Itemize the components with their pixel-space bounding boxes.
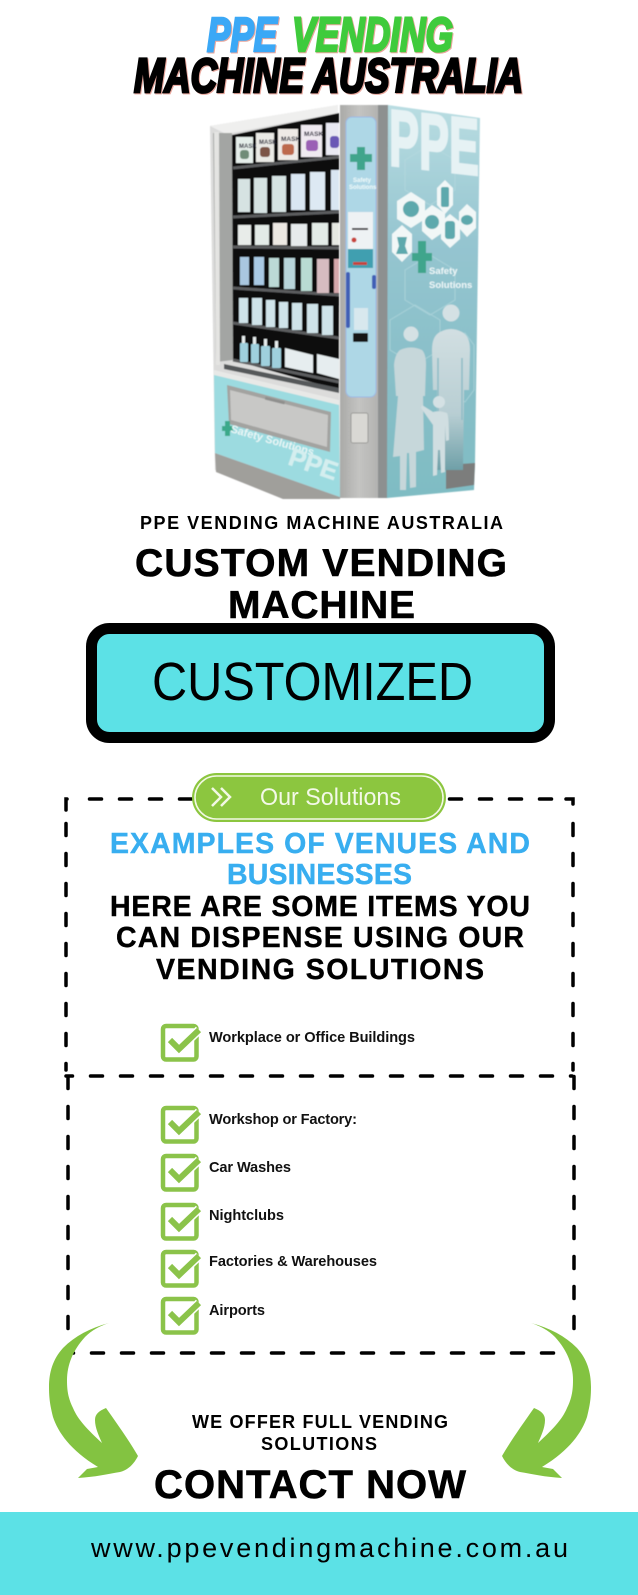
products: mask packs: MASK [304, 131, 323, 138]
heading: custom vending machine: MACHINE [228, 584, 415, 627]
side panel Safety Solutions label: Solutions [429, 280, 472, 291]
side panel family silhouette [393, 304, 470, 490]
machine interior with shelves [224, 113, 339, 393]
products: shield packs [238, 170, 339, 246]
products: mask packs: MASK [281, 136, 300, 143]
title line 1: PPE VENDING: PPE [208, 10, 279, 63]
customized banner: CUSTOMIZED [152, 652, 473, 712]
machine lower teal panel: PPE [285, 443, 341, 486]
title line 1: PPE VENDING: VENDING [293, 10, 454, 63]
side panel Safety Solutions label: Safety [429, 266, 458, 277]
checklist item: nightclubs [163, 1205, 284, 1238]
dashed frame: upper [66, 799, 573, 1070]
title line 1: PPE VENDING: PPE [207, 9, 278, 62]
heading: examples of venues: BUSINESSES [227, 859, 412, 891]
title line 2: MACHINE AUSTRALIA: MACHINE AUSTRALIA [135, 51, 524, 104]
customized banner [92, 628, 550, 738]
dashed divider between frames [66, 1074, 572, 1078]
checklist item: workshop [163, 1108, 357, 1142]
heading: items you can dispense: VENDING SOLUTIONS [156, 954, 484, 986]
footer band [0, 1512, 638, 1595]
call to action text: SOLUTIONS [261, 1434, 377, 1454]
subtitle: PPE VENDING MACHINE AUSTRALIA [140, 513, 503, 533]
title line 1: PPE VENDING: VENDING [292, 9, 453, 62]
heading: custom vending machine: CUSTOM VENDING [135, 542, 507, 585]
heading: items you can dispense: HERE ARE SOME ITEMS YOU [110, 891, 530, 923]
title line 2: MACHINE AUSTRALIA: MACHINE AUSTRALIA [134, 50, 523, 103]
title [134, 9, 524, 104]
checklist item: factories: Factories & Warehouses [209, 1254, 377, 1270]
machine centre column: Solutions [349, 185, 377, 191]
machine lower teal panel [214, 370, 341, 497]
our solutions pill [192, 773, 446, 822]
machine front frame [210, 105, 340, 499]
heading: custom vending machine [135, 542, 507, 627]
checklist item: airports [163, 1299, 265, 1332]
machine side panel [387, 93, 480, 498]
title line 1: PPE VENDING [207, 9, 454, 63]
side panel PPE lettering: PPE [389, 93, 479, 193]
products: sanitizer bottles and wipes [240, 336, 339, 379]
call to action text [192, 1412, 448, 1454]
checklist item: factories [163, 1252, 377, 1286]
heading: examples of venues [110, 828, 530, 891]
machine lower teal panel: Safety Solutions [229, 423, 315, 459]
call to action text: WE OFFER FULL VENDING [192, 1412, 448, 1432]
arrow: right [502, 1323, 591, 1478]
our solutions pill: Our Solutions [260, 784, 401, 811]
machine centre column [340, 105, 388, 498]
checklist item: workshop: Workshop or Factory: [209, 1112, 357, 1128]
products: mask packs: MASK [259, 140, 277, 146]
footer band: www.ppevendingmachine.com.au [90, 1533, 568, 1563]
products: mask packs [236, 123, 339, 163]
contact now heading: CONTACT NOW [154, 1463, 466, 1507]
heading: examples of venues: EXAMPLES OF VENUES AND [110, 828, 530, 860]
heading: items you can dispense: CAN DISPENSE USING OUR [116, 922, 524, 954]
products: boxes [239, 257, 339, 335]
checklist item: workplace [163, 1026, 415, 1060]
products: mask packs: MASK [239, 144, 257, 150]
machine centre column: Safety [353, 178, 372, 184]
vending machine illustration [210, 93, 480, 499]
side panel hexagon icons [392, 180, 476, 273]
checklist item: airports: Airports [209, 1303, 265, 1319]
checklist item: car washes: Car Washes [209, 1160, 291, 1176]
checklist item: workplace: Workplace or Office Buildings [209, 1030, 415, 1046]
arrow: left [49, 1323, 138, 1478]
side panel Safety Solutions label [429, 266, 472, 291]
checklist item: car washes [163, 1156, 291, 1190]
icon: double chevron [212, 788, 230, 806]
dashed frame: lower [62, 1076, 575, 1353]
checklist item: nightclubs: Nightclubs [209, 1208, 284, 1224]
heading: items you can dispense [110, 891, 530, 986]
